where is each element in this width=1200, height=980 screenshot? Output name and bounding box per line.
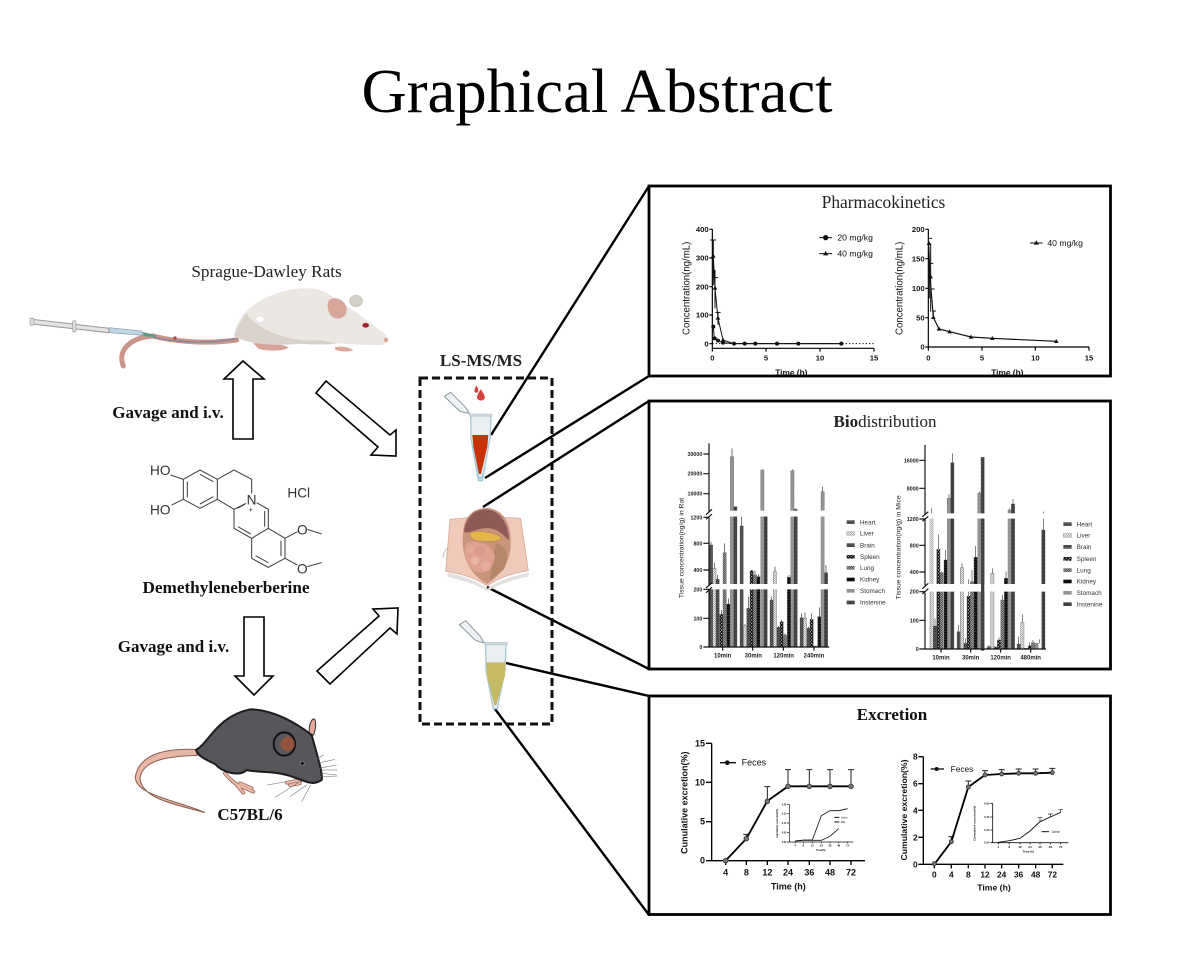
chart: tissue concentration in rat: 240min <box>804 653 825 659</box>
chart: plasma concentration oral: 5 <box>764 353 769 362</box>
chart: plasma concentration iv: 150 <box>912 254 925 263</box>
chart: plasma concentration oral: 0 <box>704 339 709 348</box>
chart: tissue concentration in mice: 30min <box>962 656 980 662</box>
icon: urine sample tube <box>459 621 508 709</box>
chart: cumulative excretion right: 8 <box>913 752 918 762</box>
title: Graphical Abstract <box>361 56 833 126</box>
legend: rat organs: Lung <box>860 565 875 572</box>
chart: cumulative excretion right: Feces <box>951 764 973 774</box>
chart: tissue concentration in mice: 100 <box>910 618 919 624</box>
chart: plasma concentration oral: 300 <box>696 254 709 263</box>
chart: tissue concentration in mice: 1200 <box>907 517 919 523</box>
legend: rat organs: Kidney <box>860 577 880 584</box>
inset: urine and bile excretion: 8 <box>803 844 805 848</box>
chart: plasma concentration oral: 15 <box>870 353 879 362</box>
chemical structure: O <box>297 522 308 537</box>
chart: plasma concentration iv: 15 <box>1085 353 1094 362</box>
arrow: mouse to samples <box>317 608 398 684</box>
chart: plasma concentration oral: 10 <box>816 353 824 362</box>
legend: rat organs: Instenine <box>860 600 886 607</box>
chart: tissue concentration in rat: 100 <box>693 616 702 622</box>
chart: plasma concentration oral: 40 mg/kg <box>837 249 873 259</box>
legend: mice organs: Heart <box>1077 521 1092 528</box>
heading: Biodistribution: Biodistribution <box>834 412 937 431</box>
inset: urine excretion: 48 <box>1049 845 1052 849</box>
legend: rat organs: Spleen <box>860 554 880 561</box>
chart: cumulative excretion left: 10 <box>695 777 705 787</box>
legend: mice organs: Lung <box>1077 567 1091 574</box>
inset: urine and bile excretion: 24 <box>820 844 823 848</box>
legend: rat organs: Brain <box>860 542 875 549</box>
chart: tissue concentration in rat: 10min <box>714 653 732 659</box>
chart: cumulative excretion right: 36 <box>1014 870 1024 880</box>
chart: cumulative excretion right: 2 <box>913 832 918 842</box>
chart: tissue concentration in rat: 800 <box>693 541 702 547</box>
chart: cumulative excretion left: 0 <box>700 856 705 866</box>
inset: urine and bile excretion: 0.10 <box>782 823 787 825</box>
arrow: down to mouse <box>235 617 273 695</box>
chart: cumulative excretion left: 15 <box>695 738 705 748</box>
inset: urine and bile excretion: Bile <box>841 820 846 824</box>
chart: cumulative excretion left: 8 <box>744 867 749 877</box>
chart: cumulative excretion right <box>899 752 1068 893</box>
heading: Excretion: Excretion <box>857 705 928 724</box>
chart: tissue concentration in rat <box>679 443 886 659</box>
chart: plasma concentration iv: 50 <box>916 313 925 322</box>
legend: rat organs <box>847 520 886 607</box>
label: Gavage and i.v. lower: Gavage and i.v. <box>118 637 229 656</box>
inset: urine excretion: 36 <box>1038 845 1042 849</box>
chemical structure: + <box>249 505 253 514</box>
chart: cumulative excretion left <box>679 738 865 892</box>
panel: Biodistribution <box>649 401 1110 669</box>
legend: mice organs: Instenine <box>1077 601 1103 608</box>
inset: urine and bile excretion: 72 <box>846 844 850 848</box>
chart: cumulative excretion left: 5 <box>700 817 705 827</box>
label: C57BL/6: C57BL/6 <box>217 805 283 824</box>
chart: cumulative excretion right: Time (h) <box>977 883 1011 893</box>
inset: urine and bile excretion: 0.15 <box>782 814 787 816</box>
chart: tissue concentration in mice: Tissue concentration(ng/g) in Mice <box>896 495 903 599</box>
label: Demethyleneberberine: Demethyleneberberine <box>142 578 310 597</box>
inset: urine excretion: Cumulative excretion(%) <box>972 806 976 841</box>
chart: plasma concentration oral: 100 <box>696 311 709 320</box>
chart: cumulative excretion left: 12 <box>762 867 772 877</box>
chart: cumulative excretion right: 4 <box>949 870 954 880</box>
chart: tissue concentration in mice: 800 <box>910 543 919 549</box>
inset: urine excretion: 0.00 <box>984 841 990 845</box>
chart: cumulative excretion right: 0 <box>932 870 937 880</box>
chart: tissue concentration in mice: 400 <box>910 570 919 576</box>
dashed sample box <box>420 378 552 724</box>
chart: cumulative excretion right: 12 <box>980 870 990 880</box>
chart: plasma concentration iv: 10 <box>1031 353 1040 362</box>
legend: mice organs <box>1063 521 1103 608</box>
chemical structure: HO <box>150 463 170 478</box>
chart: tissue concentration in rat: 1200 <box>690 515 702 521</box>
legend: rat organs: Stomach <box>860 588 885 595</box>
chart: plasma concentration iv: 0 <box>920 343 925 352</box>
chart: tissue concentration in rat: 30000 <box>688 452 702 458</box>
chart: plasma concentration iv: 5 <box>980 353 985 362</box>
chart: cumulative excretion right: 8 <box>966 870 971 880</box>
chart: cumulative excretion left: 4 <box>723 867 728 877</box>
inset: urine and bile excretion: Time(h) <box>816 848 826 852</box>
chart: plasma concentration oral: Concentration(ng/mL) <box>682 242 693 335</box>
chart: cumulative excretion left: Feces <box>742 758 767 768</box>
chart: tissue concentration in rat: 200 <box>693 587 702 593</box>
chart: plasma concentration oral: Time (h) <box>775 367 808 377</box>
legend: mice organs: Brain <box>1077 544 1092 551</box>
chart: tissue concentration in mice <box>896 445 1103 662</box>
chart: plasma concentration iv: 0 <box>926 353 930 362</box>
chart: cumulative excretion right: 4 <box>913 805 918 815</box>
inset: urine excretion <box>972 801 1068 854</box>
inset: urine excretion: 12 <box>1018 845 1022 849</box>
chart: plasma concentration iv: Time (h) <box>991 367 1024 377</box>
inset: urine and bile excretion: 0.20 <box>782 804 787 806</box>
chart: plasma concentration iv: 100 <box>912 284 925 293</box>
icon: C57BL/6 mouse <box>135 709 337 813</box>
panel: Excretion <box>649 696 1110 914</box>
chart: cumulative excretion right: 0 <box>913 859 918 869</box>
chart: tissue concentration in rat: 0 <box>699 645 702 651</box>
icon: blood sample tube <box>444 386 492 481</box>
inset: urine excretion: Time (h) <box>1023 850 1034 854</box>
chart: tissue concentration in mice: 8000 <box>907 486 919 492</box>
chart: cumulative excretion right: 48 <box>1031 870 1041 880</box>
inset: urine excretion: 24 <box>1028 845 1032 849</box>
chemical structure: HO <box>150 503 170 518</box>
chart: tissue concentration in mice: 200 <box>910 590 919 596</box>
chart: tissue concentration in rat: Tissue concentration(ng/g) in Rat <box>679 498 686 598</box>
inset: urine and bile excretion: 0.05 <box>782 833 787 835</box>
inset: urine and bile excretion: Cumulative excretion(%) <box>776 809 779 838</box>
chemical structure <box>150 463 322 576</box>
icon: opened abdomen organs <box>443 508 529 591</box>
chart: cumulative excretion right: 6 <box>913 779 918 789</box>
chart: tissue concentration in rat: 120min <box>773 653 794 659</box>
label: Sprague-Dawley Rats: Sprague-Dawley Rats <box>191 262 342 281</box>
chart: tissue concentration in rat: 10000 <box>688 492 702 498</box>
chart: plasma concentration oral: 20 mg/kg <box>837 233 873 243</box>
arrow: rat to samples <box>316 381 396 456</box>
legend: mice organs: Stomach <box>1077 590 1102 597</box>
legend: mice organs: Liver <box>1077 533 1090 540</box>
chart: tissue concentration in mice: 480min <box>1020 656 1041 662</box>
chart: plasma concentration oral <box>682 225 879 377</box>
chart: cumulative excretion left: Time (h) <box>771 882 806 892</box>
inset: urine excretion: Urine <box>1052 830 1060 834</box>
chart: plasma concentration iv: 200 <box>912 225 925 234</box>
inset: urine and bile excretion: 0.00 <box>782 842 787 844</box>
inset: urine and bile excretion: 48 <box>837 844 841 848</box>
chart: cumulative excretion left: Cunulative excretion(%) <box>679 751 689 854</box>
chart: plasma concentration oral: 200 <box>696 282 709 291</box>
icon: rat with tail-vein syringe <box>30 288 388 366</box>
connector lines from samples to panels <box>483 186 649 915</box>
chart: cumulative excretion left: 72 <box>846 867 856 877</box>
chart: tissue concentration in rat: 30min <box>745 653 762 659</box>
chart: cumulative excretion left: 24 <box>783 867 793 877</box>
chart: plasma concentration oral: 400 <box>696 225 709 234</box>
chemical structure: HCl <box>287 485 310 500</box>
inset: urine and bile excretion: 36 <box>829 844 832 848</box>
chart: tissue concentration in rat: 400 <box>693 568 702 574</box>
inset: urine excretion: 0.60 <box>984 801 990 805</box>
chart: tissue concentration in rat: 20000 <box>688 472 702 478</box>
chart: tissue concentration in mice: 16000 <box>904 458 919 464</box>
chart: cumulative excretion right: Cumulative excretion(%) <box>899 759 909 861</box>
inset: urine and bile excretion: Urine <box>841 815 848 819</box>
inset: urine excretion: 8 <box>1008 845 1010 849</box>
arrow: up to rat <box>224 361 264 439</box>
label: LS-MS/MS: LS-MS/MS <box>440 351 522 370</box>
inset: urine excretion: 72 <box>1059 845 1063 849</box>
label: Gavage and i.v. upper: Gavage and i.v. <box>112 403 224 422</box>
chart: plasma concentration oral: 0 <box>710 353 714 362</box>
chart: cumulative excretion left: 48 <box>825 867 835 877</box>
chart: tissue concentration in mice: 10min <box>932 656 950 662</box>
chart: tissue concentration in mice: 0 <box>916 647 919 653</box>
chart: cumulative excretion left: 36 <box>804 867 814 877</box>
chart: cumulative excretion right: 24 <box>997 870 1007 880</box>
chart: plasma concentration iv <box>894 225 1094 377</box>
inset: urine and bile excretion: 4 <box>794 844 796 848</box>
inset: urine excretion: 0.20 <box>984 828 990 832</box>
chemical structure: N <box>247 493 257 508</box>
heading: Pharmacokinetics: Pharmacokinetics <box>822 192 946 212</box>
inset: urine excretion: 4 <box>997 845 999 849</box>
legend: rat organs: Heart <box>860 520 876 527</box>
panel: Pharmacokinetics <box>649 186 1110 377</box>
chart: cumulative excretion right: 72 <box>1048 870 1057 880</box>
chemical structure: O <box>297 561 308 576</box>
chart: plasma concentration iv: Concentration(ng/mL) <box>894 242 905 335</box>
inset: urine and bile excretion: 12 <box>811 844 814 848</box>
legend: mice organs: Kidney <box>1077 579 1097 586</box>
legend: mice organs: Spleen <box>1077 556 1097 563</box>
inset: urine excretion: 0.40 <box>984 815 990 819</box>
inset: urine and bile excretion <box>776 804 853 852</box>
chart: plasma concentration iv: 40 mg/kg <box>1047 238 1083 248</box>
chart: tissue concentration in mice: 120min <box>990 656 1011 662</box>
legend: rat organs: Liver <box>860 531 874 538</box>
